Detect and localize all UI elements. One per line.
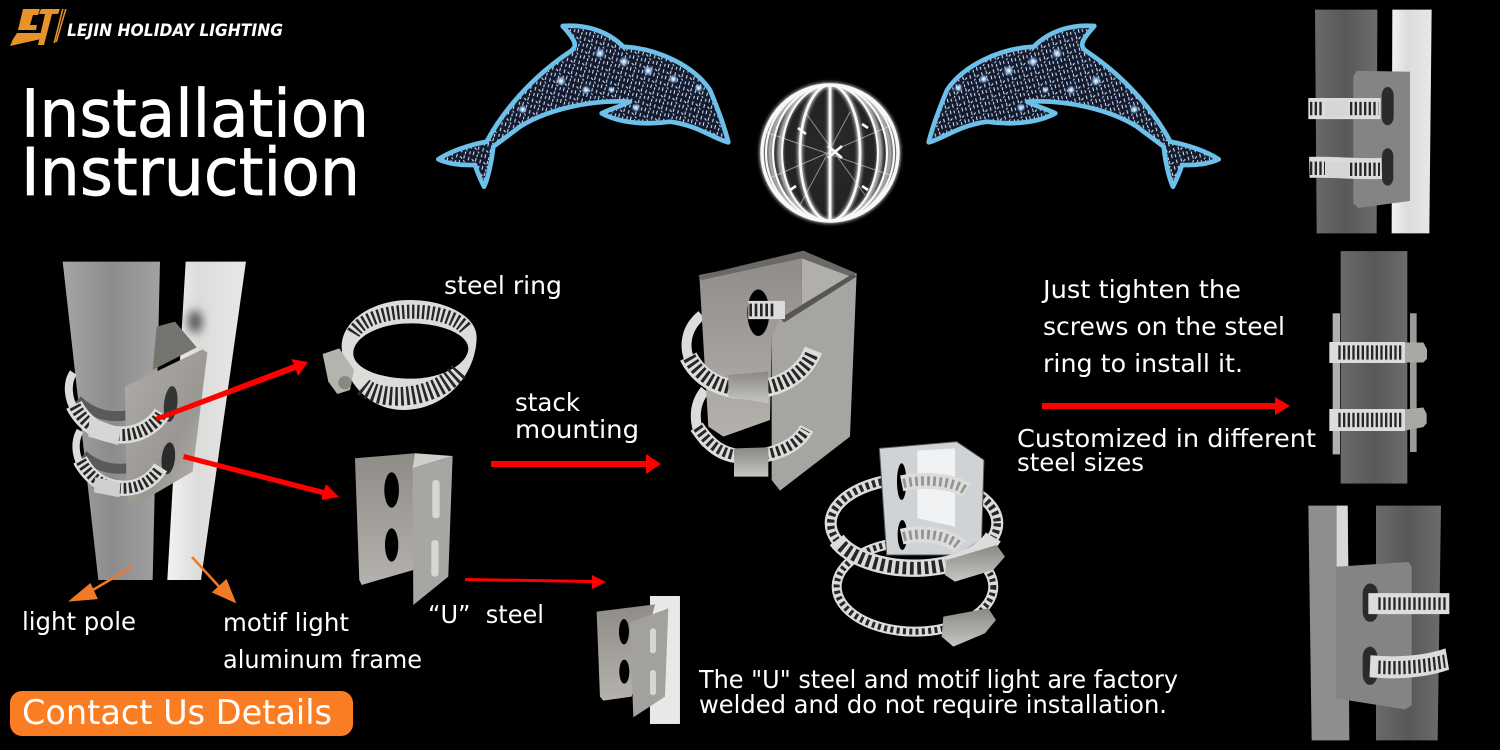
text: customized sizes: Customized in different (1017, 424, 1316, 453)
steel ring illustration (323, 300, 477, 410)
photo: side view A (1308, 10, 1432, 233)
text: welded note: The "U" steel and motif light are factory (698, 665, 1178, 694)
photo: side view C (1308, 506, 1449, 740)
text: tighten instruction (1041, 275, 1285, 378)
clamps (945, 545, 1005, 582)
logo mark (10, 9, 67, 46)
motif: right dolphin (929, 26, 1219, 187)
pole shadows under rings (77, 400, 128, 469)
label: light pole: light pole (22, 607, 136, 636)
arrow: tighten (1042, 397, 1290, 415)
frame shadow (188, 310, 202, 333)
logo (10, 9, 283, 46)
contact button: Contact Us Details (22, 693, 332, 733)
main assembly photo: pole, frame, bracket, rings (63, 262, 246, 580)
text: welded note: welded and do not require installation. (699, 690, 1167, 719)
label: motif light aluminum frame (223, 608, 422, 674)
stacked bracket with rings (687, 251, 857, 491)
motif: left dolphin (438, 26, 728, 187)
text: customized sizes: steel sizes (1017, 448, 1144, 477)
logo: LEJIN HOLIDAY LIGHTING (67, 21, 283, 41)
label: stack mounting: mounting (515, 415, 639, 444)
steel rings (69, 373, 162, 497)
lower ring (837, 542, 993, 632)
aluminum frame (167, 262, 246, 580)
title: Installation (21, 76, 369, 152)
u steel illustration (355, 453, 453, 605)
bracket rear view with rings (831, 442, 1005, 647)
text: tighten instruction: Just tighten the (1041, 275, 1241, 304)
light pole (63, 262, 160, 580)
bracket body (699, 255, 802, 437)
arrow: stack mounting (491, 454, 661, 474)
arrow: to u steel (183, 454, 339, 500)
arrow: to welded u steel (465, 575, 606, 589)
upper ring front (837, 537, 993, 568)
text: customized sizes (1017, 424, 1316, 477)
label: U steel: “U” steel (428, 600, 544, 629)
ring back segments (687, 315, 707, 443)
label: motif light aluminum frame: aluminum frame (223, 645, 422, 674)
title: Instruction (21, 134, 360, 211)
label: stack mounting: stack (515, 388, 581, 417)
label: motif light aluminum frame: motif light (223, 608, 349, 637)
rings front (688, 350, 813, 390)
u-steel bracket (125, 322, 207, 507)
text: tighten instruction: screws on the steel (1043, 312, 1285, 341)
small u steel welded on frame (597, 596, 680, 724)
label: stack mounting (515, 388, 639, 444)
label: steel ring: steel ring (444, 271, 562, 300)
bracket rear plate (879, 442, 984, 555)
arrow: to steel ring (155, 359, 308, 421)
photo: side view B (1329, 251, 1427, 484)
text: tighten instruction: ring to install it. (1043, 349, 1243, 378)
arrow: frame label (192, 557, 234, 601)
motif: light ball (752, 74, 908, 230)
text: welded note (698, 665, 1178, 719)
title (21, 76, 369, 211)
upper ring back (831, 478, 997, 568)
arrow: light pole label (72, 567, 132, 600)
